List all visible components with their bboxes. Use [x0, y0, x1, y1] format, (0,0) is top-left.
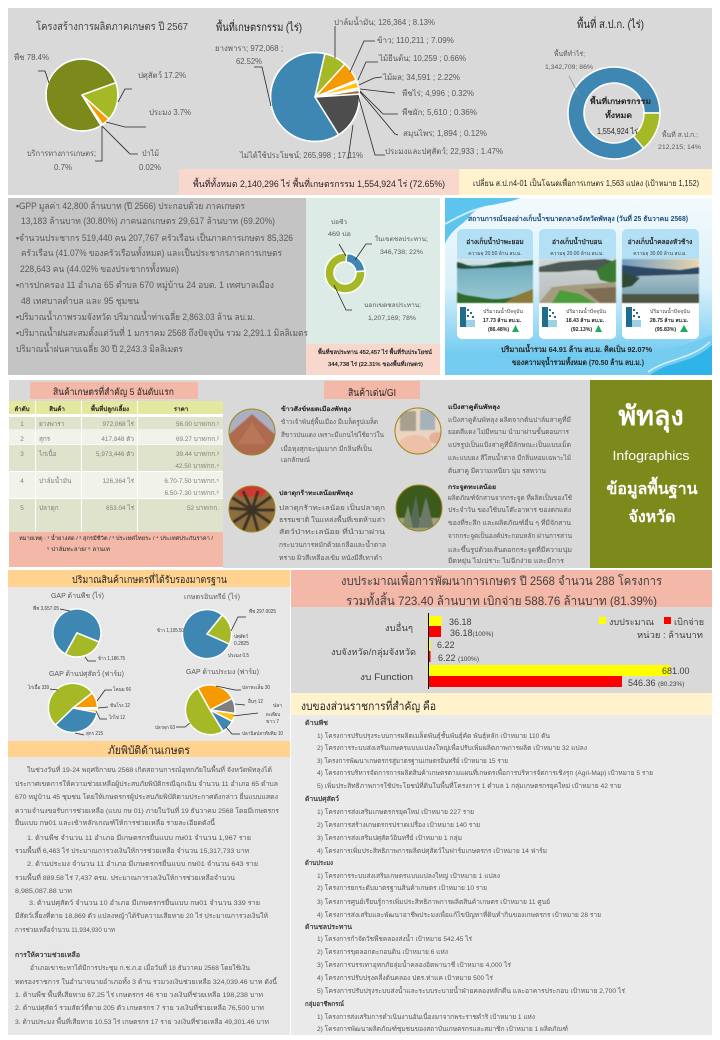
- list: crops: 2) โครงการระบบส่งเสริมเกษตรแบบแปลงใหญ่เพื่อปรับเพิ่มผลิตภาพการผลิต เป้าหมาย 32 แปลง: [317, 743, 587, 752]
- text: assistance provided: การให้ความช่วยเหลือ: [15, 950, 80, 959]
- list: crops: 5) เพิ่มประสิทธิภาพการใช้ประโยชน์ที่ดินในพื้นที่โครงการ 1 ตำบล 1 กลุ่มเกษตรกรยุคใหม่ เป้าหมาย 42 ราย: [317, 781, 621, 790]
- callout: irrigated area: [306, 344, 440, 375]
- text: dried catfish: ปลาดุกร้าทะเลน้อย เป็นปลาดุก: [279, 503, 385, 512]
- table: top five products: 5: [20, 505, 24, 512]
- pie chart: farm land: ข้าว; 110,211 ; 7.09%: [377, 36, 454, 45]
- list: fisheries: 4) โครงการส่งเสริมและพัฒนาอาชีพประมงเพื่อแก้ไขปัญหาที่ดินทำกินของเกษตรกร เป้าหมาย 28 ราย: [317, 910, 601, 919]
- panel: province facts: ▪การปกครอง 11 อำเภอ 65 ตำบล 670 หมู่บ้าน 24 อบต. 1 เทศบาลเมือง: [16, 280, 274, 291]
- panel: agricultural disaster: [8, 741, 290, 1035]
- pie chart: GAP livestock: [27, 670, 131, 737]
- list: fisheries: [305, 858, 601, 919]
- card: Pa Phayom reservoir: อ่างเก็บน้ำป่าพะยอม: [466, 236, 524, 246]
- card: Khlong Hua Chang reservoir: อ่างเก็บน้ำคลองหัวช้าง: [628, 236, 692, 246]
- pie chart: GAP crops: ข้าว 1,186.75: [98, 655, 125, 662]
- table: top five products: ยางพารา: [39, 421, 64, 428]
- text: sago flour: ยอดสีแดง ไม่มีหนาม นำมาผ่านขั้นตอนการ: [448, 427, 570, 436]
- pie chart: organic farming: ประมง 0.5: [228, 653, 249, 659]
- donut chart: land reform area: ทั้งหมด: [605, 109, 632, 120]
- table: top five products: 52 บาท/กก.: [187, 505, 219, 512]
- text: krajood weaving: กระจูดทะเลน้อย: [448, 483, 496, 492]
- text: Sangyod rice: เอกลักษณ์: [281, 456, 310, 464]
- list: crops: ด้านพืช: [305, 718, 329, 727]
- heading: budget: รวมทั้งสิ้น 723.40 ล้านบาท เบิกจ่าย 588.76 ล้านบาท (81.39%): [346, 592, 657, 608]
- panel: province facts: ▪ปริมาณน้ำภาพรวมจังหวัด ปริมาณน้ำท่าเฉลี่ย 2,863.03 ล้าน ลบ.ม.: [16, 310, 255, 322]
- pie chart: GAP livestock: ไก่ไข่ 12: [108, 714, 125, 721]
- text: disaster description: 3. ด้านปศุสัตว์ จำนวน 10 อำเภอ มีเกษตรกรยื่นแบบ กษ01 จำนวน 339 ราย: [29, 898, 260, 907]
- bar chart: budget vs disbursement: 6.22: [437, 640, 455, 650]
- heading: key budgets: [291, 693, 712, 715]
- text: Sangyod rice: เมื่อหุงสุกจะนุ่มมาก มีกลิ่นที่เป็น: [281, 444, 373, 453]
- list: crops: 3) โครงการพัฒนาเกษตรกรสู่มาตรฐานเกษตรอินทรีย์ เป้าหมาย 15 ราย: [317, 757, 508, 765]
- bar chart: budget vs disbursement: งบ Function: [360, 672, 413, 682]
- donut chart: irrigation area: [325, 218, 428, 322]
- pie chart: GAP fisheries: GAP ด้านประมง (ฟาร์ม): [186, 668, 259, 676]
- panel: province title: Infographics: [612, 449, 690, 463]
- pie chart: GAP crops: [33, 591, 125, 662]
- text: sago flour: และแบบผง สีใสนน้ำตาล มีกลิ่นหอมเฉพาะไม้: [448, 453, 571, 462]
- photo: sago flour: [394, 408, 442, 454]
- table: top five products: 653.04 ไร่: [106, 504, 135, 512]
- pie chart: production structure: พืช 78.4%: [14, 53, 49, 62]
- text: total water volume: ปริมาณน้ำรวม 64.91 ล้าน ลบ.ม. คิดเป็น 92.07%: [501, 343, 652, 354]
- text: sago flour: ต้นสาคู มีความเหนียว นุ่ม รสหวาน: [448, 467, 547, 475]
- pie chart: farm land: พืชผัก; 5,610 ; 0.36%: [402, 108, 477, 117]
- table: top five products: สุกร: [39, 436, 51, 443]
- panel: province facts: 13,183 ล้านบาท (30.80%) ภาคนอกเกษตร 29,617 ล้านบาท (69.20%): [21, 216, 275, 226]
- table: top five products: 6.50-7.30 บาท/กก.⁶: [164, 490, 219, 497]
- pie chart: organic farming: พืช 297.0025: [249, 608, 276, 615]
- table: top five products: ไก่เนื้อ: [38, 449, 57, 458]
- card: Pa Phayom reservoir: ปริมาณน้ำปัจจุบัน: [483, 307, 523, 315]
- photo: krajood weaving: [396, 485, 442, 531]
- pie chart: farm land: ไม้ยืนต้น; 10,259 ; 0.66%: [378, 54, 466, 63]
- text: disaster description: ในช่วงวันที่ 19-24 พฤศจิกายน 2568 เกิดสถานการณ์อุทกภัยในพื้นที่ จังหวัดพัทลุงได้: [27, 765, 272, 774]
- donut chart: land reform area: [545, 49, 701, 159]
- table: top five products: 417,848 ตัว: [101, 436, 134, 443]
- list: fisheries: 2) โครงการยกระดับมาตรฐานสินค้าเกษตร เป้าหมาย 10 ราย: [317, 884, 487, 892]
- text: krajood weaving: จากกระจูดเป็นองค์ประกอบหลัก ผ่านการสาน: [448, 531, 573, 540]
- panel: top five farm products: [9, 380, 223, 567]
- text: assistance provided: ทดรองราชการ ในอำนาจนายอำเภอทั้ง 3 ด้าน รวมวงเงินช่วยเหลือ 324,039.46 บาท ดังนี้: [15, 977, 278, 986]
- pie chart: production structure: ป่าไม้: [142, 149, 159, 158]
- text: sago flour: แป้งสาคูต้นพัทลุง: [448, 403, 500, 412]
- list: fisheries: 3) โครงการศูนย์เรียนรู้การเพิ่มประสิทธิภาพการผลิตสินค้าเกษตร เป้าหมาย 11 ศูนย์: [317, 897, 550, 906]
- table: top five products: พื้นที่ปลูก/เลี้ยง: [90, 403, 129, 414]
- table: top five products: 4: [20, 478, 24, 485]
- card: Pa Bon reservoir: ปริมาณน้ำปัจจุบัน: [566, 307, 606, 315]
- list: occupational groups: [305, 1000, 568, 1033]
- text: disaster description: การช่วยเหลือจำนวน 11,934,930 บาท: [15, 926, 115, 934]
- list: crops: 1) โครงการปรับปรุงระบบการผลิตเมล็ดพันธุ์ชั้นพันธุ์คัด พันธุ์หลัก เป้าหมาย 110 ตัน: [317, 731, 550, 740]
- pie chart: organic farming: ข้าว 1,105.50: [157, 627, 184, 634]
- list: irrigation: 5) โครงการปรับปรุงระบบส่งน้ำและระบบระบายน้ำฝ่ายคลองหลักดีน และอาคารประกอบ เป้าหมาย 2,700 ไร่: [317, 986, 625, 995]
- panel: featured GI products: [223, 380, 590, 568]
- text: krajood weaving: และขึ้นรูปด้วยเส้นตอกกระจูดที่มีความนุ่ม: [448, 545, 572, 554]
- panel: province facts: 48 เทศบาลตำบล และ 95 ชุมชน: [21, 296, 139, 307]
- icon: water level: [460, 307, 475, 327]
- card: Pa Bon reservoir: อ่างเก็บน้ำป่าบอน: [552, 236, 603, 246]
- donut chart: land reform area: 1,554,924 ไร่: [597, 127, 639, 136]
- panel: key government budgets: [291, 693, 712, 1035]
- pie chart: farm land: 62.52%: [236, 57, 262, 66]
- text: assistance provided: [15, 950, 278, 1026]
- card: Pa Bon reservoir: (92.13%): [571, 327, 592, 333]
- pie chart: GAP livestock: GAP ด้านปศุสัตว์ (ฟาร์ม): [49, 670, 124, 678]
- pie chart: farm land: [215, 16, 503, 160]
- text: dried catfish: กระบวนการหมักด้วยเกลือและน้ำตาล: [279, 540, 386, 549]
- list: irrigation: 1) โครงการกำจัดวัชพืชคลองส่งน้ำ เป้าหมาย 542.45 ไร่: [317, 934, 472, 943]
- pie chart: organic farming: 0.2825: [234, 641, 249, 647]
- donut chart: irrigation area: 346,738; 22%: [380, 250, 424, 256]
- pie chart: farm land: ไม่ได้ใช้ประโยชน์; 265,998 ; 17.11%: [239, 150, 363, 160]
- text: Sangyod rice: สีขาวปนแดง เพราะมีแกนไข่ใช้ยาว่ใน: [281, 431, 385, 439]
- panel: certified products: [8, 570, 290, 741]
- card: Khlong Hua Chang reservoir: ความจุ 30.00 ล้าน ลบ.ม.: [633, 250, 687, 257]
- pie chart: production structure: ปศุสัตว์ 17.2%: [138, 70, 186, 80]
- heading: featured products: สินค้าเด่น/GI: [348, 387, 396, 399]
- text: krajood weaving: ยืดหยุ่น ไม่เปราะ ไม่ฉีกง่าย และมีการ: [448, 557, 565, 565]
- heading: certified products: ปริมาณสินค้าเกษตรที่ได้รับรองมาตรฐาน: [72, 572, 227, 586]
- pie chart: farm land: ไม้ผล; 34,591 ; 2.22%: [382, 73, 460, 82]
- pie chart: production structure: ประมง 3.7%: [149, 108, 191, 117]
- heading: agricultural disaster: [8, 741, 290, 757]
- pie chart: production structure: บริการทางการเกษตร;: [27, 149, 96, 158]
- text: sago flour: แปรรูปเป็นแป้งสาคูที่มีลักษณะเป็นแบบเม็ด: [448, 440, 571, 449]
- table: top five products: 1: [20, 421, 24, 428]
- list: livestock: [305, 794, 547, 855]
- panel: province facts: ▪จำนวนประชากร 519,440 คน 207,767 ครัวเรือน เป็นภาคการเกษตร 85,326: [16, 231, 293, 243]
- donut chart: land reform area: พื้นที่ทำไร่;: [554, 49, 585, 58]
- text: dried catfish: [279, 489, 386, 562]
- text: disaster description: 2. ด้านประมง จำนวน 11 อำเภอ มีเกษตรกรยื่นแบบ กษ01 จำนวน 643 ราย: [27, 859, 258, 868]
- list: crops: 4) โครงการบริหารจัดการการผลิตสินค้าเกษตรตามแผนที่เกษตรเพื่อการบริหารจัดการเชิงรุก (Agri-Map) เป้าหมาย 5 ราย: [317, 768, 653, 777]
- donut chart: irrigation area: ในเขตชลประทาน;: [375, 235, 428, 243]
- text: assistance provided: อำเภอเขาชะหาได้มีการประชุม ก.ช.ภ.อ เมื่อวันที่ 18 ธันวาคม 2568 โดยใช้เงิน: [30, 963, 250, 972]
- table: top five products: 5,973,446 ตัว: [96, 451, 134, 458]
- pie chart: GAP fisheries: ปลาทะเล็ม 30: [242, 683, 270, 691]
- panel: reservoir situation: [445, 198, 712, 375]
- table: top five products: 972,068 ไร่: [102, 420, 135, 428]
- list: irrigation: 3) โครงการบรรเทาอุทกภัยลุ่มน้ำคลองอิตพานาชี เป้าหมาย 4,000 ไร่: [317, 960, 511, 969]
- table: top five products: [9, 401, 223, 532]
- bar chart: budget vs disbursement: 681.00: [662, 666, 690, 676]
- bar chart: budget vs disbursement: [331, 613, 690, 689]
- list: livestock: ด้านปศุสัตว์: [305, 794, 339, 803]
- table: top five products: 126,364 ไร่: [102, 477, 135, 485]
- panel: province facts: 228,643 คน (44.02% ของประชากรทั้งหมด): [20, 262, 179, 274]
- bar chart: budget vs disbursement: งบจังหวัด/กลุ่มจังหวัด: [331, 647, 416, 658]
- text: total water volume: ของความจุน้ำรวมทั้งหมด (70.50 ล้าน ลบ.ม.): [512, 356, 644, 368]
- callout: irrigated area: 344,738 ไร่ (22.31% ของพื้นที่เกษตร): [328, 359, 423, 368]
- table: top five products: ปาล์มน้ำมัน: [39, 476, 72, 485]
- text: Sangyod rice: [281, 405, 385, 464]
- panel: province title: ข้อมูลพื้นฐาน: [606, 476, 698, 500]
- text: total water volume: [501, 343, 652, 368]
- donut chart: land reform area: พื้นที่ ส.ป.ก.;: [662, 130, 698, 139]
- table note: [9, 532, 223, 567]
- text: disaster description: ความจำนงขอรับการช่วยเหลือ (แบบ กษ 01) ภายในวันที่ 19 ธันวาคม 2568 โดยมีเกษตรกร: [15, 806, 279, 815]
- bar chart: budget vs disbursement: 36.18: [449, 617, 472, 627]
- callout: total area: [179, 169, 459, 195]
- list: occupational groups: 1) โครงการส่งเสริมการดำเนินงานอันเนื่องมาจากพระราชดำริ เป้าหมาย 1 แห่ง: [317, 1012, 535, 1021]
- text: sago flour: แป้งสาคูต้นพัทลุง ผลิตจากต้นปาล์มสาคูที่มี: [448, 415, 571, 424]
- pie chart: GAP fisheries: ปลานิลปลาทับทิม 10: [242, 730, 283, 737]
- heading: agricultural disaster: ภัยพิบัติด้านเกษตร: [108, 745, 190, 757]
- panel: province facts: ครัวเรือน (41.07% ของครัวเรือนทั้งหมด) และเป็นประชากรภาคการเกษตร: [21, 246, 282, 258]
- heading: key budgets: งบของส่วนราชการที่สำคัญ คือ: [301, 698, 436, 713]
- bar chart: budget vs disbursement: งบอื่นๆ: [385, 621, 413, 633]
- card: Pa Phayom reservoir: (86.48%): [488, 327, 509, 333]
- list: livestock: 2) โครงการสร้างเกษตรกรปราดเปรื่อง เป้าหมาย 140 ราย: [317, 820, 480, 829]
- callout: total area: พื้นที่ทั้งหมด 2,140,296 ไร่ พื้นที่เกษตรกรรม 1,554,924 ไร่ (72.65%): [193, 177, 445, 189]
- pie chart: GAP livestock: โคนม 66: [113, 686, 131, 693]
- donut chart: land reform area: 212,215; 14%: [658, 144, 701, 151]
- pie chart: production structure: [14, 53, 191, 172]
- text: disaster description: มีสัตว์เลี้ยงที่ตาย 18,869 ตัว แปลงหญ้าได้รับความเสียหาย 20 ไร่ ประมาณการวงเงินให้: [15, 911, 268, 920]
- heading: budget: [341, 572, 663, 608]
- list: irrigation: [305, 922, 625, 995]
- pie chart: GAP fisheries: [155, 668, 283, 737]
- text: disaster description: ยื่นแบบ กษ01 และเข้าหลักเกณฑ์ให้การช่วยเหลือ รายละเอียดดังนี้: [15, 818, 216, 827]
- text: assistance provided: 1. ด้านพืช พื้นที่เสียหาย 67.25 ไร่ เกษตรกร 46 ราย วงเงินที่ช่วยเหลือ 198,238 บาท: [15, 990, 263, 999]
- pie chart: GAP fisheries: ปลา: [273, 703, 282, 709]
- heading: reservoir status: สถานการณ์ของอ่างเก็บน้ำขนาดกลางจังหวัดพัทลุง (วันที่ 25 ธันวาคม 2568): [468, 212, 688, 223]
- pie chart: GAP fisheries: ปลาดุก 63: [155, 725, 175, 731]
- table: top five products: 3: [20, 451, 24, 458]
- text: disaster description: 670 หมู่บ้าน 45 ชุมชน โดยให้เกษตรกรผู้ประสบภัยพิบัติตามประกาศดังกล่าว ยื่นแบบแสดง: [15, 792, 278, 801]
- pie chart: farm land: ปาล์มน้ำมัน; 126,364 ; 8.13%: [334, 16, 435, 27]
- table note: ⁵ ปาล์มทะลาย/ ⁶ ลานเท: [47, 546, 110, 553]
- list: irrigation: ด้านชลประทาน: [305, 922, 353, 931]
- list: livestock: 3) โครงการส่งเสริมปศุสัตว์อินทรีย์ เป้าหมาย 1 กลุ่ม: [317, 834, 462, 842]
- pie chart: organic farming: ปศุสัตว์: [234, 633, 248, 640]
- list: irrigation: 2) โครงการขุดลอกตะกอนดิน เป้าหมาย 6 แห่ง: [317, 948, 448, 956]
- callout: land title conversion: เปลี่ยน ส.ป.ก4-01 เป็นโฉนดเพื่อการเกษตร 1,563 แปลง (เป้าหมาย 1,152): [473, 177, 699, 188]
- text: assistance provided: 2. ด้านปศุสัตว์ รวมสัตว์ที่ตาย 205 ตัว เกษตรกร 7 ราย วงเงินที่ช่วยเหลือ 76,500 บาท: [15, 1003, 264, 1012]
- text: disaster description: 8,985,087.88 บาท: [15, 888, 72, 895]
- legend: หน่วย : ล้านบาท: [637, 630, 703, 640]
- pie chart: GAP fisheries: ขาว 7: [266, 719, 279, 725]
- card: Khlong Hua Chang reservoir: 28.75 ล้าน ลบ.ม.: [650, 316, 689, 324]
- table: top five products: 2: [20, 436, 24, 443]
- card: Pa Bon reservoir: 18.43 ล้าน ลบ.ม.: [566, 316, 605, 324]
- pie chart: GAP crops: GAP ด้านพืช (ไร่): [51, 591, 104, 600]
- donut chart: land reform area: 1,342,709; 86%: [545, 64, 593, 71]
- card: Pa Bon reservoir: [539, 229, 616, 339]
- text: sago flour: [448, 403, 571, 475]
- heading: budget: งบประมาณเพื่อการพัฒนาการเกษตร ปี 2568 จำนวน 288 โครงการ: [341, 572, 663, 588]
- pie chart: GAP livestock: ไก่เนื้อ 339: [27, 682, 49, 691]
- callout: land title conversion: [459, 169, 712, 195]
- card: Pa Phayom reservoir: 17.73 ล้าน ลบ.ม.: [483, 316, 522, 324]
- heading: certified products: [8, 570, 290, 587]
- heading: land reform area: พื้นที่ ส.ป.ก. (ไร่): [577, 16, 644, 31]
- photo: Sangyod rice: [228, 408, 276, 456]
- card: Pa Phayom reservoir: [457, 229, 533, 339]
- text: disaster description: รวมพื้นที่ 6,463 ไร่ ประมาณการวงเงินให้การช่วยเหลือ จำนวน 15,317,733 บาท: [15, 846, 249, 855]
- table: top five products: 42.50 บาท/กก.⁴: [175, 463, 219, 470]
- table: top five products: 56.00 บาท/กก.¹: [176, 421, 219, 428]
- list: irrigation: 4) โครงการปรับปรุงคลื่งต้นคลอง ปตร.ท่าแค เป้าหมาย 500 ไร่: [317, 973, 493, 982]
- text: krajood weaving: [448, 483, 573, 565]
- table: top five products: 6.70-7.50 บาท/กก.⁵: [164, 478, 219, 485]
- panel: budget: [291, 570, 712, 693]
- pie chart: organic farming: [157, 592, 276, 659]
- table: top five products: ราคา: [174, 406, 189, 413]
- panel: province facts: ▪GPP มูลค่า 42,800 ล้านบาท (ปี 2566) ประกอบด้วย ภาคเกษตร: [16, 201, 245, 212]
- bar chart: budget vs disbursement: 6.22 (100%): [438, 653, 479, 663]
- text: disaster description: รวมพื้นที่ 889.58 ไร่ 7,437 ตรม. ประมาณการวงเงินให้การช่วยเหลือจำนวน: [15, 873, 236, 882]
- text: assistance provided: 3. ด้านประมง พื้นที่เสียหาย 10.53 ไร่ เกษตรกร 17 ราย วงเงินที่ช่วยเหลือ 49,301.46 บาท: [15, 1017, 269, 1026]
- text: Sangyod rice: ข้าวสังข์หยดเมืองพัทลุง: [281, 405, 351, 413]
- pie chart: GAP crops: พืช 3,657.05: [33, 605, 59, 612]
- photo: dried catfish: [229, 486, 275, 532]
- list: fisheries: 1) โครงการระบบส่งเสริมเกษตรแบบแปลงใหญ่ เป้าหมาย 1 แปลง: [317, 872, 500, 880]
- panel: province title: [590, 380, 712, 568]
- bar chart: budget vs disbursement: 36.18(100%): [450, 628, 494, 638]
- heading: featured products: [324, 381, 420, 399]
- pie chart: GAP fisheries: อื่นๆ 12: [248, 698, 263, 705]
- legend: งบประมาณ: [609, 617, 654, 627]
- pie chart: organic farming: เกษตรอินทรีย์ (ไร่): [184, 592, 240, 601]
- pie chart: production structure: 0.02%: [139, 163, 161, 172]
- donut chart: irrigation area: 469 บ่อ: [328, 231, 351, 238]
- text: dried catfish: สัตว์ป่าทะเลน้อย ที่นำมาผ่าน: [279, 527, 386, 536]
- text: disaster description: [15, 765, 279, 934]
- panel: province facts: ปริมาณน้ำฝนคาบเฉลี่ย 30 ปี 2,243.3 มิลลิเมตร: [16, 342, 183, 354]
- table: top five products: 69.27 บาท/กก.²: [176, 436, 219, 443]
- callout: irrigated area: พื้นที่ชลประทาน 452,457 ไร่ พื้นที่รับประโยชน์: [318, 347, 432, 356]
- panel: province title: จังหวัด: [628, 508, 676, 526]
- pie chart: farm land: ยางพารา; 972,068 ;: [215, 44, 283, 53]
- bar chart: budget vs disbursement: 546.36 (80.23%): [628, 678, 684, 688]
- legend: [599, 617, 704, 640]
- heading: farm land: พื้นที่เกษตรกรรม (ไร่): [216, 19, 302, 34]
- card: Pa Phayom reservoir: ความจุ 20.50 ล้าน ลบ.ม.: [468, 250, 522, 257]
- table note: หมายเหตุ : ¹ น้ำยางสด / ² สุกรมีชีวิต / ³ ประเทศไทยระ / ⁴ ประเทศประกันราคา /: [19, 534, 214, 542]
- text: krajood weaving: ของที่ระลึก และผลิตภัณฑ์อื่น ๆ ที่มีจักสาน: [448, 518, 572, 527]
- pie chart: farm land: พืชไร่; 4,996 ; 0.32%: [402, 89, 474, 98]
- legend: เบิกจ่าย: [674, 617, 704, 627]
- list: crops: [305, 718, 653, 790]
- pie chart: farm land: สมุนไพร; 1,894 ; 0.12%: [403, 129, 487, 138]
- panel: province facts: [8, 198, 308, 375]
- list: occupational groups: กลุ่มอาชีพกรณ์: [305, 1000, 344, 1008]
- list: fisheries: ด้านประมง: [305, 858, 333, 867]
- text: krajood weaving: ผลิตภัณฑ์จักสานจากกระจูด ที่ผลิตเป็นของใช้: [448, 493, 573, 502]
- card: Pa Bon reservoir: ความจุ 20.00 ล้าน ลบ.ม.: [550, 250, 604, 257]
- list: livestock: 1) โครงการส่งเสริมเกษตรกรยุคใหม่ เป้าหมาย 227 ราย: [317, 808, 474, 816]
- panel: province title: พัทลุง: [618, 401, 684, 433]
- pie chart: production structure: 0.7%: [54, 163, 72, 172]
- text: dried catfish: ธรรมชาติ ในแหล่งพื้นที่เขตห้ามล่า: [279, 515, 385, 524]
- table: top five products: สินค้า: [49, 405, 65, 413]
- donut chart: irrigation area: นอกเขตชลประทาน;: [364, 302, 421, 309]
- donut chart: land reform area: พื้นที่เกษตรกรรม: [590, 95, 651, 106]
- panel: province facts: ▪ปริมาณน้ำฝนสะสมตั้งแต่วันที่ 1 มกราคม 2568 ถึงปัจจุบัน รวม 2,291.1 มิลลิเมตร: [16, 326, 308, 339]
- panel: irrigation: [306, 198, 440, 375]
- text: disaster description: 1. ด้านพืช จำนวน 11 อำเภอ มีเกษตรกรยื่นแบบ กษ01 จำนวน 1,967 ราย: [27, 833, 251, 842]
- donut chart: irrigation area: 1,207,169; 78%: [368, 316, 417, 322]
- pie chart: GAP fisheries: ตะเพียน: [266, 711, 280, 718]
- card: Khlong Hua Chang reservoir: (95.83%): [655, 327, 676, 333]
- panel: agricultural structure and land use: [8, 8, 712, 195]
- table: top five products: ลำดับ: [14, 405, 30, 413]
- table: top five products: ปลาดุก: [39, 505, 59, 512]
- pie chart: farm land: ประมงและปศุสัตว์; 22,933 ; 1.47%: [385, 146, 503, 156]
- card: Khlong Hua Chang reservoir: ปริมาณน้ำปัจจุบัน: [650, 307, 690, 315]
- donut chart: irrigation area: บ่อซีว: [331, 218, 347, 226]
- text: krajood weaving: ประจำวัน ของใช้บนโต๊ะอาหาร ของตกแต่ง: [448, 506, 571, 514]
- icon: water level: [626, 307, 641, 327]
- text: dried catfish: ปลาดุกร้าทะเลน้อยพัทลุง: [279, 489, 353, 497]
- icon: water level: [542, 307, 557, 327]
- list: occupational groups: 2) โครงการพัฒนาผลิตภัณฑ์ชุมชนของสถาบันเกษตรกรและสมาชิก เป้าหมาย 1 ผลิตภัณฑ์: [317, 1025, 568, 1033]
- heading: top five products: สินค้าเกษตรที่สำคัญ 5 อันดับแรก: [53, 385, 174, 398]
- list: livestock: 4) โครงการเพิ่มประสิทธิภาพการผลิตปศุสัตว์ในฟาร์มเกษตรกร เป้าหมาย 14 ฟาร์ม: [317, 846, 547, 855]
- table: top five products: 39.44 บาท/กก.³: [176, 451, 219, 458]
- pie chart: GAP livestock: สุกร 215: [86, 731, 103, 737]
- text: disaster description: ประกาศเขตการให้ความช่วยเหลือผู้ประสบภัยพิบัติกรณีฉุกเฉิน จำนวน 11 อำเภอ 65 ตำบล: [15, 780, 278, 788]
- pie chart: GAP livestock: ชันโรง 12: [110, 702, 130, 709]
- text: Sangyod rice: ข้าวเจ้าพันธุ์พื้นเมือง มีเมล็ดรูปเมล็ด: [281, 417, 378, 426]
- card: Khlong Hua Chang reservoir: [622, 229, 699, 339]
- heading: production structure: โครงสร้างการผลิตภาคเกษตร ปี 2567: [36, 20, 188, 33]
- text: dried catfish: ทราย ผิวสีเหลืองเข้ม หนังมีสีเทาดำ: [279, 554, 382, 562]
- heading: top five products: [30, 382, 198, 399]
